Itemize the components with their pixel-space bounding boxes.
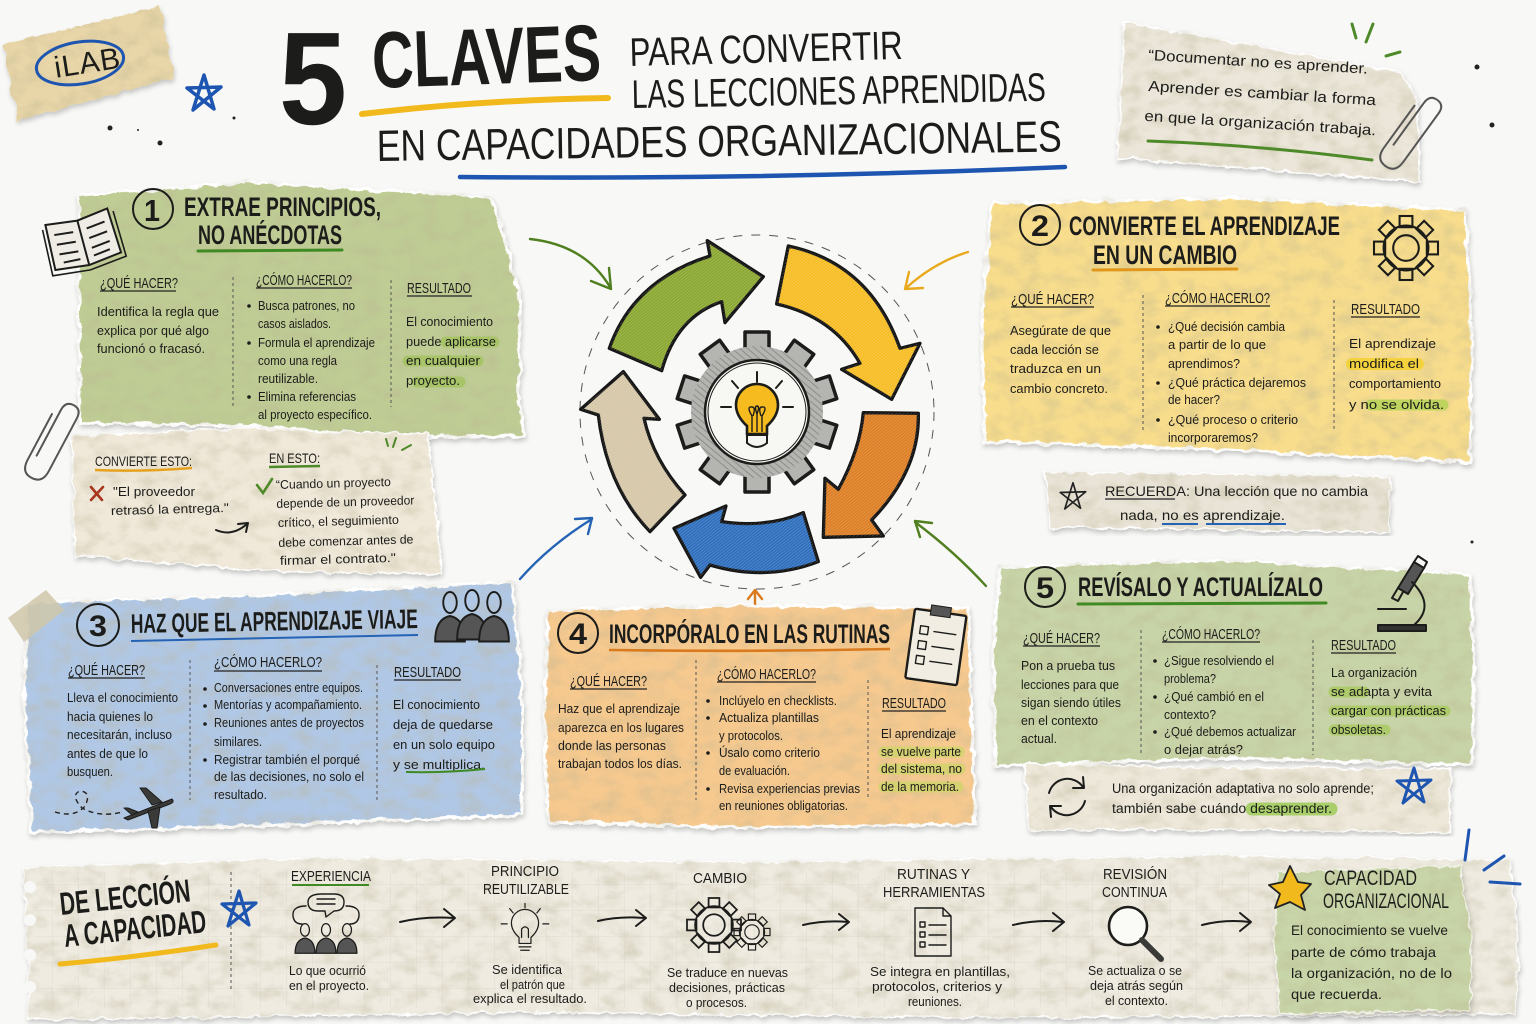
column: cómo hacerlo: ¿Qué debemos actualizar <box>1164 725 1296 739</box>
column: resultado: El aprendizaje <box>881 727 956 741</box>
after column: firmar el contrato." <box>280 551 396 568</box>
column: qué hacer <box>1010 291 1111 396</box>
quote text <box>1144 47 1380 139</box>
column: qué hacer <box>97 275 219 356</box>
arrow <box>1202 913 1251 931</box>
column: cómo hacerlo: ¿Qué cambió en el <box>1164 690 1264 704</box>
heading <box>1069 211 1340 270</box>
column: cómo hacerlo: como una regla <box>258 354 337 368</box>
step: revisión continua: REVISIÓN <box>1103 866 1167 883</box>
reminder note <box>1045 472 1390 532</box>
final patch: capacidad organizacional <box>1269 866 1472 1014</box>
step: cambio: Se traduce en nuevas <box>667 966 788 980</box>
step: rutinas y herramientas: protocolos, criterios y <box>872 980 1003 994</box>
column: qué hacer: ¿QUÉ HACER? <box>100 275 178 292</box>
column: resultado: comportamiento <box>1349 377 1441 391</box>
arrow <box>1013 913 1064 931</box>
callout: organización adaptativa <box>1024 764 1450 832</box>
column: cómo hacerlo: ¿CÓMO HACERLO? <box>717 666 816 683</box>
after column: “Cuando un proyecto <box>276 475 391 492</box>
step: cambio: o procesos. <box>686 996 747 1010</box>
column: qué hacer: hacia quienes lo <box>67 710 153 724</box>
icon: blue star <box>1397 768 1431 803</box>
column: cómo hacerlo: ¿CÓMO HACERLO? <box>256 272 352 289</box>
column: cómo hacerlo <box>706 666 860 813</box>
after column <box>257 438 416 568</box>
column: cómo hacerlo: o dejar atrás? <box>1164 743 1243 757</box>
number badge 1 <box>133 189 173 229</box>
step: cambio: decisiones, prácticas <box>669 981 785 995</box>
before column: retrasó la entrega." <box>111 501 229 518</box>
column: cómo hacerlo: Registrar también el porqué <box>214 753 360 767</box>
column: cómo hacerlo <box>247 272 375 422</box>
column: cómo hacerlo: Actualiza plantillas <box>719 711 819 725</box>
number badge 3: 3 <box>89 610 107 643</box>
arrow: green <box>609 241 763 371</box>
heading: EXTRAE PRINCIPIOS, <box>184 192 381 222</box>
number badge 2: 2 <box>1031 210 1049 243</box>
step: rutinas y herramientas: RUTINAS Y <box>897 866 970 883</box>
column: resultado: deja de quedarse <box>393 718 493 732</box>
step: cambio <box>667 870 788 1010</box>
heading: NO ANÉCDOTAS <box>198 219 342 250</box>
panel 1: extrae principios <box>40 182 524 437</box>
number badge 2 <box>1020 205 1060 245</box>
column: resultado: del sistema, no <box>881 762 962 776</box>
column: resultado: y se multiplica. <box>393 758 485 772</box>
column: cómo hacerlo: ¿Sigue resolviendo el <box>1164 654 1274 668</box>
column: resultado: La organización <box>1331 666 1417 680</box>
heading: INCORPÓRALO EN LAS RUTINAS <box>609 618 890 649</box>
tape <box>8 590 64 642</box>
strip heading <box>58 872 216 964</box>
patch text: que recuerda. <box>1291 986 1382 1002</box>
step: cambio: CAMBIO <box>693 870 747 887</box>
step: rutinas y herramientas: Se integra en plantillas, <box>870 965 1010 979</box>
icon: team of three <box>435 590 509 642</box>
title <box>279 5 1065 178</box>
column: cómo hacerlo: ¿Qué decisión cambia <box>1168 320 1285 334</box>
reminder text <box>1105 483 1368 524</box>
column: resultado: RESULTADO <box>407 280 471 297</box>
icon: gold star <box>1269 866 1311 910</box>
yellow underline <box>362 98 608 114</box>
patch text: la organización, no de lo <box>1291 965 1452 981</box>
grid paper <box>34 872 1274 1008</box>
callout text: Una organización adaptativa no solo aprende; <box>1112 781 1374 796</box>
column: resultado <box>881 695 962 794</box>
column: cómo hacerlo: Mentorías y acompañamiento. <box>214 698 362 712</box>
step: principio reutilizable: REUTILIZABLE <box>483 881 569 898</box>
title line 1: PARA CONVERTIR <box>629 24 903 75</box>
column: cómo hacerlo: Úsalo como criterio <box>719 745 820 760</box>
column: cómo hacerlo: contexto? <box>1164 708 1216 722</box>
before column <box>91 453 248 532</box>
column: qué hacer: antes de que lo <box>67 747 148 761</box>
column: cómo hacerlo: Revisa experiencias previas <box>719 782 860 796</box>
column: resultado <box>1331 637 1446 737</box>
icon: airplane with dashed trail <box>55 788 173 828</box>
column: qué hacer: cada lección se <box>1010 343 1099 357</box>
step: revisión continua: el contexto. <box>1105 994 1168 1008</box>
heading <box>131 604 418 641</box>
column: qué hacer: traduzca en un <box>1010 362 1101 376</box>
arrow: green to cycle <box>530 239 611 289</box>
colored arrows <box>581 241 920 577</box>
icon: open book <box>40 207 127 280</box>
arrow: beige <box>581 372 685 532</box>
step: rutinas y herramientas <box>870 866 1010 1009</box>
icon: clipboard checklist <box>905 603 967 685</box>
column: resultado: obsoletas. <box>1331 723 1386 737</box>
column: resultado: El conocimiento <box>406 315 493 329</box>
after column: crítico, el seguimiento <box>278 513 399 530</box>
step: revisión continua: Se actualiza o se <box>1088 964 1182 978</box>
panel 4: incorpóralo en las rutinas <box>545 603 975 828</box>
heading: REVÍSALO Y ACTUALÍZALO <box>1078 571 1323 602</box>
number badge 3 <box>77 604 119 646</box>
icon: blue star near logo <box>187 75 221 110</box>
column: qué hacer: ¿QUÉ HACER? <box>1023 630 1100 647</box>
dashed guide circles <box>580 235 934 589</box>
patch text: El conocimiento se vuelve <box>1291 922 1448 938</box>
step: revisión continua <box>1088 866 1183 1008</box>
arrow: yellow <box>777 246 920 399</box>
reminder text: nada, no es aprendizaje. <box>1120 507 1285 523</box>
icon: cycle arrows <box>1049 777 1085 817</box>
column: cómo hacerlo: aprendimos? <box>1168 357 1240 371</box>
column: cómo hacerlo: casos aislados. <box>258 317 331 331</box>
quote text: Aprender es cambiar la forma <box>1148 78 1377 109</box>
number badge 5: 5 <box>1036 572 1054 605</box>
tag: iLAB taped label <box>2 6 174 120</box>
column: qué hacer: sigan siendo útiles <box>1021 696 1121 710</box>
column: qué hacer: lecciones para que <box>1021 678 1119 692</box>
logo text: iLAB <box>52 42 122 85</box>
arrow: blue to cycle <box>520 518 592 579</box>
column: cómo hacerlo: Busca patrones, no <box>258 299 355 313</box>
column: resultado: cargar con prácticas <box>1331 704 1446 718</box>
title word CLAVES: CLAVES <box>370 8 602 105</box>
column: qué hacer: aparezca en los lugares <box>558 721 684 735</box>
arrow <box>803 914 849 930</box>
after column: depende de un proveedor <box>276 493 415 511</box>
before column: "El proveedor <box>113 485 195 499</box>
icon: microscope <box>1378 556 1427 631</box>
column: qué hacer: funcionó o fracasó. <box>97 342 205 356</box>
column: cómo hacerlo: problema? <box>1164 672 1216 686</box>
column: cómo hacerlo: ¿Qué proceso o criterio <box>1168 413 1298 427</box>
column: resultado: RESULTADO <box>1331 637 1396 654</box>
number badge 4: 4 <box>569 618 587 651</box>
before column: CONVIERTE ESTO: <box>95 453 192 469</box>
bottom strip: de lección a capacidad <box>24 830 1520 1020</box>
column: resultado: proyecto. <box>406 374 460 388</box>
column: cómo hacerlo: ¿Qué práctica dejaremos <box>1168 376 1306 390</box>
column: resultado: El aprendizaje <box>1349 337 1436 351</box>
column: qué hacer: Lleva el conocimiento <box>67 691 178 705</box>
sparkle ticks <box>1465 830 1520 884</box>
patch heading: ORGANIZACIONAL <box>1323 890 1449 913</box>
step: principio reutilizable: PRINCIPIO <box>491 863 559 880</box>
quote text: “Documentar no es aprender. <box>1148 47 1368 78</box>
column: qué hacer: ¿QUÉ HACER? <box>68 662 145 679</box>
column: cómo hacerlo: ¿CÓMO HACERLO? <box>1162 626 1260 643</box>
column: qué hacer: donde las personas <box>558 739 666 753</box>
strip heading: A CAPACIDAD <box>62 903 208 954</box>
central cycle diagram <box>580 235 934 589</box>
step: experiencia <box>289 868 371 993</box>
icon: blue star <box>222 891 256 926</box>
column: qué hacer <box>67 662 178 779</box>
column: resultado: El conocimiento <box>393 698 480 712</box>
heading <box>184 192 381 251</box>
column: cómo hacerlo: de evaluación. <box>719 764 790 778</box>
column: cómo hacerlo: Reuniones antes de proyectos <box>214 716 364 730</box>
quote text: en que la organización trabaja. <box>1144 108 1377 139</box>
patch heading <box>1323 867 1449 913</box>
patch text: parte de cómo trabaja <box>1291 944 1436 960</box>
callout: convierte esto en esto <box>21 398 441 574</box>
step: experiencia: en el proyecto. <box>289 979 369 993</box>
column: cómo hacerlo: incorporaremos? <box>1168 431 1258 445</box>
column: cómo hacerlo: resultado. <box>214 788 267 802</box>
column: qué hacer: actual. <box>1021 732 1057 746</box>
step: rutinas y herramientas: reuniones. <box>908 995 962 1009</box>
step: experiencia: Lo que ocurrió <box>289 964 366 978</box>
column: resultado: se vuelve parte <box>881 745 961 759</box>
arrow: orange to cycle <box>748 590 762 610</box>
step: principio reutilizable: el patrón que <box>500 978 565 992</box>
quote note <box>1118 22 1445 182</box>
column: cómo hacerlo: Conversaciones entre equipos. <box>214 681 363 695</box>
icon: paperclip <box>1376 91 1445 173</box>
reminder text: RECUERDA: Una lección que no cambia <box>1105 483 1368 499</box>
column: resultado <box>406 280 496 388</box>
column: resultado: se adapta y evita <box>1331 685 1432 699</box>
column: cómo hacerlo <box>1156 290 1306 445</box>
central gear <box>677 332 837 492</box>
callout text: también sabe cuándo desaprender. <box>1112 801 1332 816</box>
icon: gear <box>1374 216 1438 280</box>
patch text <box>1291 922 1452 1002</box>
column: qué hacer: ¿QUÉ HACER? <box>1011 291 1094 308</box>
sparkle ticks <box>1352 24 1400 56</box>
number badge 4 <box>558 613 598 653</box>
column: resultado: en cualquier <box>406 354 480 368</box>
column: qué hacer: cambio concreto. <box>1010 382 1108 396</box>
arrow: orange <box>823 413 918 537</box>
column: resultado: de la memoria. <box>881 780 959 794</box>
logo ellipse <box>33 35 127 91</box>
column: cómo hacerlo: al proyecto específico. <box>258 408 372 422</box>
column: cómo hacerlo <box>1153 626 1296 757</box>
column: cómo hacerlo: de las decisiones, no solo el <box>214 770 364 784</box>
column: resultado <box>393 664 495 772</box>
arrow <box>598 910 646 926</box>
column: cómo hacerlo: en reuniones obligatorias. <box>719 799 848 813</box>
number badge 1: 1 <box>144 193 160 228</box>
step: principio reutilizable: Se identifica <box>492 963 562 977</box>
patch heading: CAPACIDAD <box>1324 867 1417 890</box>
step: rutinas y herramientas: HERRAMIENTAS <box>883 884 985 901</box>
title line 2: LAS LECCIONES APRENDIDAS <box>631 66 1046 117</box>
column: qué hacer: trabajan todos los días. <box>558 757 682 771</box>
heading: HAZ QUE EL APRENDIZAJE VIAJE <box>131 604 418 639</box>
column: qué hacer: busquen. <box>67 765 113 779</box>
column: qué hacer <box>1021 630 1121 746</box>
column: cómo hacerlo: de hacer? <box>1168 393 1220 407</box>
column: cómo hacerlo: ¿CÓMO HACERLO? <box>214 654 322 671</box>
number badge 5 <box>1025 567 1065 607</box>
column: resultado <box>1349 301 1444 412</box>
column: cómo hacerlo: Elimina referencias <box>258 390 356 404</box>
punch holes <box>24 881 36 993</box>
icon: star outline <box>1060 483 1086 509</box>
decorative dots <box>108 64 1494 544</box>
column: cómo hacerlo: a partir de lo que <box>1168 338 1266 352</box>
column: cómo hacerlo: Formula el aprendizaje <box>258 336 375 350</box>
column: resultado: RESULTADO <box>1351 301 1420 318</box>
panel 3: haz que el aprendizaje viaje <box>8 582 522 832</box>
column: qué hacer: necesitarán, incluso <box>67 728 172 742</box>
blue underline <box>460 167 1065 178</box>
title line 3: EN CAPACIDADES ORGANIZACIONALES <box>376 112 1062 171</box>
column: cómo hacerlo: Inclúyelo en checklists. <box>719 694 837 708</box>
column: qué hacer: Haz que el aprendizaje <box>558 702 680 716</box>
step: revisión continua: CONTINUA <box>1102 884 1167 901</box>
heading: CONVIERTE EL APRENDIZAJE <box>1069 211 1340 241</box>
heading: EN UN CAMBIO <box>1093 240 1237 270</box>
callout text <box>1112 781 1374 816</box>
column: qué hacer: ¿QUÉ HACER? <box>570 673 647 690</box>
column: resultado: en un solo equipo <box>393 738 495 752</box>
column: cómo hacerlo: ¿CÓMO HACERLO? <box>1165 290 1270 307</box>
column: resultado: y no se olvida. <box>1349 398 1444 412</box>
title numeral 5: 5 <box>279 5 347 152</box>
column: resultado: RESULTADO <box>882 695 946 712</box>
column: cómo hacerlo <box>203 654 364 802</box>
lightbulb <box>721 372 793 447</box>
arrow <box>400 909 455 927</box>
column: cómo hacerlo: y protocolos. <box>719 729 783 743</box>
column: resultado: puede aplicarse <box>406 335 496 349</box>
column: cómo hacerlo: similares. <box>214 735 262 749</box>
column: cómo hacerlo: reutilizable. <box>258 372 318 386</box>
arrow: green to cycle right <box>915 521 986 586</box>
arrow: yellow to cycle <box>905 252 968 289</box>
step: principio reutilizable: explica el resultado. <box>473 992 587 1006</box>
icon: paperclip <box>21 398 82 484</box>
column: resultado: modifica el <box>1349 357 1419 371</box>
strip heading: DE LECCIÓN <box>58 872 192 922</box>
column: qué hacer: Identifica la regla que <box>97 305 219 319</box>
step: experiencia: EXPERIENCIA <box>291 868 371 885</box>
column: qué hacer <box>558 673 684 771</box>
column: qué hacer: explica por qué algo <box>97 324 209 338</box>
panel 2: convierte el aprendizaje <box>982 198 1472 462</box>
arrow: blue <box>674 506 818 577</box>
after column: debe comenzar antes de <box>278 532 414 550</box>
column: resultado: RESULTADO <box>394 664 461 681</box>
column: qué hacer: Pon a prueba tus <box>1021 659 1115 673</box>
after column: EN ESTO: <box>269 450 320 466</box>
step: revisión continua: deja atrás según <box>1090 979 1183 993</box>
column: qué hacer: en el contexto <box>1021 714 1098 728</box>
column: qué hacer: Asegúrate de que <box>1010 324 1111 338</box>
green underline <box>1148 141 1372 160</box>
panel 5: revísalo y actualízalo <box>993 556 1474 766</box>
step: principio reutilizable <box>473 863 587 1006</box>
